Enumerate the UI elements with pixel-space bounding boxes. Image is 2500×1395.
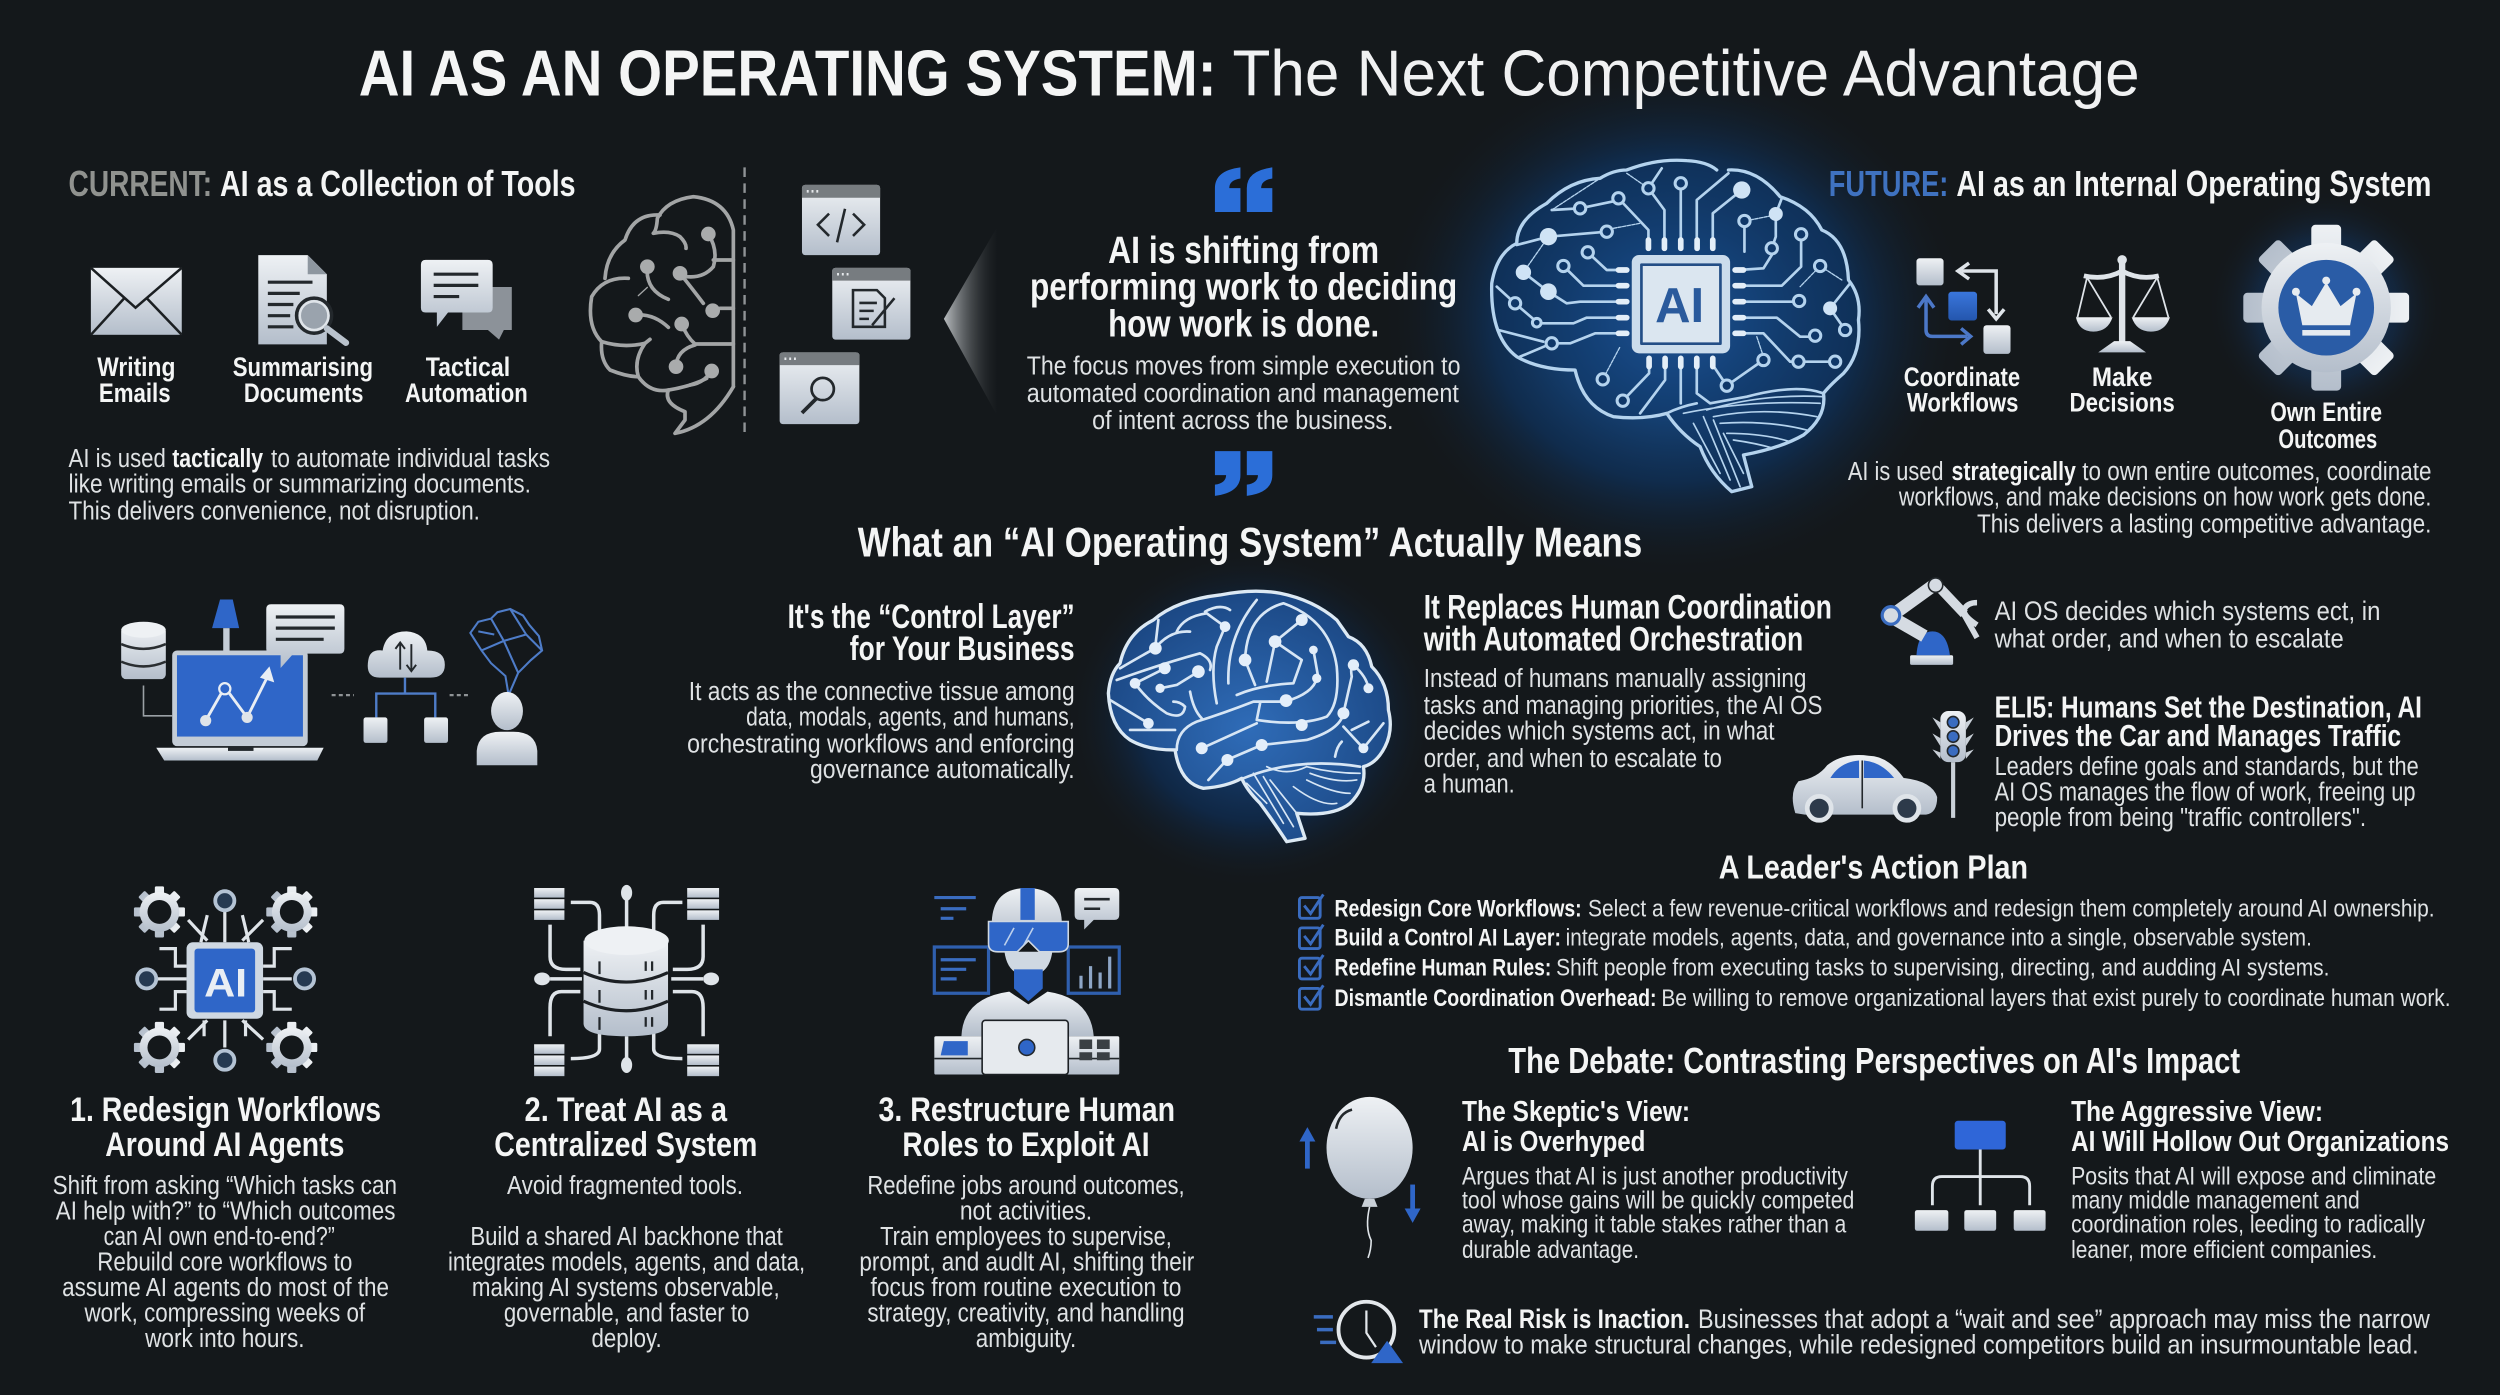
brain circuit traces	[1497, 168, 1850, 413]
person	[477, 692, 537, 765]
text: control layer: for Your Business	[850, 630, 1075, 668]
text: replaces human coordination: decides which systems act, in what	[1424, 716, 1775, 746]
text: aggressive view: Posits that AI will expose and climinate	[2071, 1164, 2436, 1191]
icon: AI agent chip with gears	[134, 886, 317, 1073]
heading: current	[69, 164, 576, 204]
chip	[1618, 240, 1743, 367]
text: central statement: The focus moves from simple execution to	[1027, 351, 1460, 381]
text: step 3: strategy, creativity, and handling	[867, 1298, 1185, 1328]
heading: step 1: Around AI Agents	[105, 1126, 344, 1164]
title	[359, 37, 2140, 110]
icon: closing quote	[1215, 451, 1272, 496]
text: aggressive view: many middle management and	[2071, 1187, 2360, 1214]
text: AI OS decides: AI OS decides which systems ect, in	[1995, 595, 2380, 626]
future labels: Coordinate	[1904, 362, 2020, 392]
text: current description: tactically	[172, 443, 264, 473]
text: central statement: automated coordination and management	[1027, 378, 1460, 408]
text: ELI5: people from being "traffic controllers".	[1995, 802, 2366, 832]
icon: central database with servers	[534, 885, 719, 1076]
future labels: Workflows	[1907, 387, 2018, 417]
icon: traffic light	[1932, 711, 1974, 818]
panel: current state	[69, 164, 576, 526]
window: code	[802, 185, 880, 255]
laptop	[156, 650, 324, 760]
text: step 3: prompt, and audlt AI, shifting their	[859, 1247, 1194, 1277]
window: search	[780, 352, 859, 424]
heading: action plan: A Leader's Action Plan	[1719, 849, 2028, 886]
text: skeptic's view: The Skeptic's View:	[1462, 1096, 1690, 1128]
icon: AI agent chip with gears: AI	[204, 961, 247, 1005]
tool labels: Documents	[244, 378, 364, 408]
text: skeptic's view: AI is Overhyped	[1462, 1126, 1645, 1158]
text: future description: AI is used	[1848, 456, 1944, 486]
cloud network	[332, 631, 469, 743]
heading: what an AI OS means: What an “AI Operating System” Actually Means	[858, 518, 1642, 565]
text: replaces human coordination	[1423, 589, 1832, 798]
chat bubble	[266, 604, 344, 668]
action items: integrate models, agents, data, and governance into a single, observable system.	[1566, 924, 2312, 951]
icon: document with magnifier	[258, 255, 346, 344]
arrow: transition cone	[944, 228, 996, 415]
text: AI OS decides	[1994, 595, 2380, 653]
icon: person with headset at console	[934, 888, 1119, 1075]
text: step 2: integrates models, agents, and data,	[448, 1247, 805, 1277]
text: step 2: making AI systems observable,	[472, 1272, 780, 1302]
future labels: Outcomes	[2278, 424, 2377, 454]
future labels: Decisions	[2070, 387, 2175, 417]
heading: future: FUTURE:	[1829, 164, 1948, 204]
text: real risk: The Real Risk is Inaction.	[1419, 1304, 1690, 1334]
heading: step 2	[494, 1091, 757, 1164]
text: step 3: ambiguity.	[976, 1323, 1076, 1353]
text: control layer: data, modals, agents, and humans,	[746, 701, 1075, 731]
text: step 1: can AI own end-to-end?”	[104, 1221, 335, 1251]
text: central statement	[1027, 229, 1460, 435]
text: step 1: work into hours.	[144, 1323, 305, 1353]
heading: debate: The Debate: Contrasting Perspectives on AI's Impact	[1508, 1041, 2240, 1081]
text: real risk	[1418, 1304, 2431, 1360]
tool labels: Automation	[405, 378, 528, 408]
heading: step 1: 1. Redesign Workflows	[70, 1091, 381, 1129]
text: ELI5: Drives the Car and Manages Traffic	[1995, 720, 2401, 753]
icon: chat bubbles	[421, 260, 512, 340]
action items: Build a Control AI Layer:	[1335, 924, 1561, 951]
text: step 1: Shift from asking “Which tasks can	[53, 1170, 397, 1200]
text: step 2: governable, and faster to	[504, 1298, 749, 1328]
text: skeptic's view: durable advantage.	[1462, 1237, 1639, 1264]
panel: action plan	[1299, 849, 2451, 1012]
text: future description	[1848, 456, 2431, 538]
text: step 2: deploy.	[592, 1323, 662, 1353]
text: current description: to automate individual tasks	[271, 443, 550, 473]
text: future description: This delivers a lasting competitive advantage.	[1977, 508, 2431, 538]
heading: step 3	[879, 1091, 1175, 1164]
text: current description: This delivers convenience, not disruption.	[69, 496, 480, 526]
panel: step 3	[859, 888, 1194, 1353]
text: ELI5: AI OS manages the flow of work, freeing up	[1995, 776, 2415, 806]
icon: org chart	[1915, 1121, 2046, 1231]
text: control layer: It acts as the connective tissue among	[689, 676, 1075, 706]
text: skeptic's view: Argues that AI is just another productivity	[1462, 1164, 1849, 1191]
heading: step 2: 2. Treat AI as a	[525, 1091, 728, 1129]
tool labels: Writing	[97, 352, 175, 382]
action items	[1335, 896, 2451, 1012]
icon: opening quote	[1215, 167, 1272, 212]
panel: step 2	[448, 885, 805, 1353]
text: replaces human coordination: with Automated Orchestration	[1423, 620, 1803, 658]
heading: step 3: Roles to Exploit AI	[902, 1126, 1150, 1164]
glow behind gear	[2207, 188, 2446, 427]
action items: Shift people from executing tasks to supervising, directing, and audding AI systems.	[1556, 955, 2329, 982]
text: central statement: of intent across the business.	[1092, 405, 1393, 435]
mini network brain	[470, 609, 542, 695]
text: control layer: orchestrating workflows and enforcing	[687, 729, 1075, 759]
text: current description	[69, 443, 550, 526]
action items: Redefine Human Rules:	[1335, 955, 1551, 982]
icon: gear with crown	[2243, 225, 2409, 391]
icon: clock with warning	[1314, 1302, 1403, 1363]
icon: central brain	[1108, 591, 1390, 842]
chip: AI	[1655, 278, 1704, 333]
tool labels	[97, 352, 528, 408]
action items: Dismantle Coordination Overhead:	[1335, 985, 1657, 1012]
text: step 3: not activities.	[960, 1196, 1092, 1226]
text: ELI5: Leaders define goals and standards, but the	[1995, 751, 2419, 781]
text: control layer: governance automatically.	[810, 754, 1075, 784]
text: step 2: Avoid fragmented tools.	[507, 1170, 743, 1200]
future labels	[1904, 362, 2382, 454]
text: aggressive view	[2071, 1096, 2449, 1264]
tool labels: Emails	[99, 378, 171, 408]
text: central statement: AI is shifting from	[1108, 229, 1379, 272]
icon: tool windows	[780, 185, 910, 424]
text: AI OS decides: what order, and when to escalate	[1994, 622, 2344, 653]
text: future description: strategically	[1952, 456, 2076, 486]
window: edit	[832, 268, 910, 340]
glow behind central brain	[1063, 545, 1440, 890]
text: step 1: Rebuild core workflows to	[97, 1247, 352, 1277]
text: skeptic's view	[1462, 1096, 1854, 1264]
text: replaces human coordination: order, and when to escalate to	[1424, 743, 1722, 773]
icon: blue AI brain	[1492, 160, 1859, 492]
panel: debate	[1299, 1041, 2449, 1363]
text: step 1: AI help with?” to “Which outcomes	[56, 1196, 395, 1226]
text: step 3: Train employees to supervise,	[880, 1221, 1172, 1251]
tool labels: Summarising	[233, 352, 373, 382]
text: aggressive view: The Aggressive View:	[2071, 1096, 2323, 1128]
future labels: Make	[2092, 362, 2152, 392]
text: step 1	[53, 1170, 397, 1353]
text: current description: like writing emails or summarizing documents.	[69, 469, 531, 499]
panel: future state	[1829, 164, 2431, 538]
text: step 2	[448, 1170, 805, 1353]
icon: balloon	[1299, 1097, 1421, 1258]
checkbox icons	[1299, 894, 1323, 1009]
cerebellum lines	[1683, 396, 1823, 487]
icon: envelope	[91, 268, 182, 335]
text: skeptic's view: away, making it table stakes rather than a	[1462, 1211, 1847, 1238]
text: step 3: Redefine jobs around outcomes,	[867, 1170, 1185, 1200]
text: replaces human coordination: Instead of humans manually assigning	[1424, 663, 1806, 693]
icon: car	[1793, 755, 1937, 820]
text: real risk: Businesses that adopt a “wait and see” approach may miss the narrow	[1698, 1304, 2431, 1334]
text: replaces human coordination: tasks and managing priorities, the AI OS	[1424, 690, 1822, 720]
text: step 3: focus from routine execution to	[871, 1272, 1181, 1302]
text: step 2: Build a shared AI backhone that	[470, 1221, 784, 1251]
tool labels: Tactical	[426, 352, 510, 382]
heading: step 3: 3. Restructure Human	[879, 1091, 1175, 1129]
text: control layer: It's the “Control Layer”	[788, 598, 1075, 636]
icon: grey half brain	[590, 197, 733, 433]
text: step 1: work, compressing weeks of	[84, 1298, 366, 1328]
text: step 1: assume AI agents do most of the	[62, 1272, 389, 1302]
heading: current: AI as a Collection of Tools	[220, 164, 576, 204]
icon: control layer illustration	[121, 599, 542, 765]
text: central statement: performing work to deciding	[1030, 266, 1457, 309]
pin	[212, 599, 239, 652]
heading: step 2: Centralized System	[494, 1126, 757, 1164]
heading: current: CURRENT:	[69, 164, 212, 204]
text: replaces human coordination: It Replaces Human Coordination	[1424, 589, 1832, 627]
text: current description: AI is used	[69, 443, 166, 473]
title: AI AS AN OPERATING SYSTEM:	[359, 37, 1217, 110]
text: step 3	[859, 1170, 1194, 1353]
text: control layer	[687, 598, 1075, 784]
text: aggressive view: coordination roles, leeding to radically	[2071, 1211, 2426, 1238]
text: aggressive view: leaner, more efficient companies.	[2071, 1237, 2377, 1264]
text: skeptic's view: tool whose gains will be quickly competed	[1462, 1187, 1854, 1214]
icon: robot arm	[1882, 578, 1977, 665]
text: ELI5	[1995, 691, 2422, 832]
database	[121, 622, 172, 716]
action items: Redesign Core Workflows:	[1335, 896, 1582, 923]
glow behind blue AI brain	[1379, 56, 1969, 582]
text: future description: to own entire outcomes, coordinate	[2082, 456, 2431, 486]
heading: step 1	[70, 1091, 381, 1164]
icon: scales	[2076, 255, 2170, 352]
text: replaces human coordination: a human.	[1424, 768, 1515, 798]
title: The Next Competitive Advantage	[1232, 37, 2140, 110]
panel: step 1	[53, 886, 397, 1353]
future labels: Own Entire	[2270, 397, 2382, 427]
text: central statement: how work is done.	[1108, 302, 1379, 345]
icon: coordinate workflows	[1916, 258, 2011, 354]
